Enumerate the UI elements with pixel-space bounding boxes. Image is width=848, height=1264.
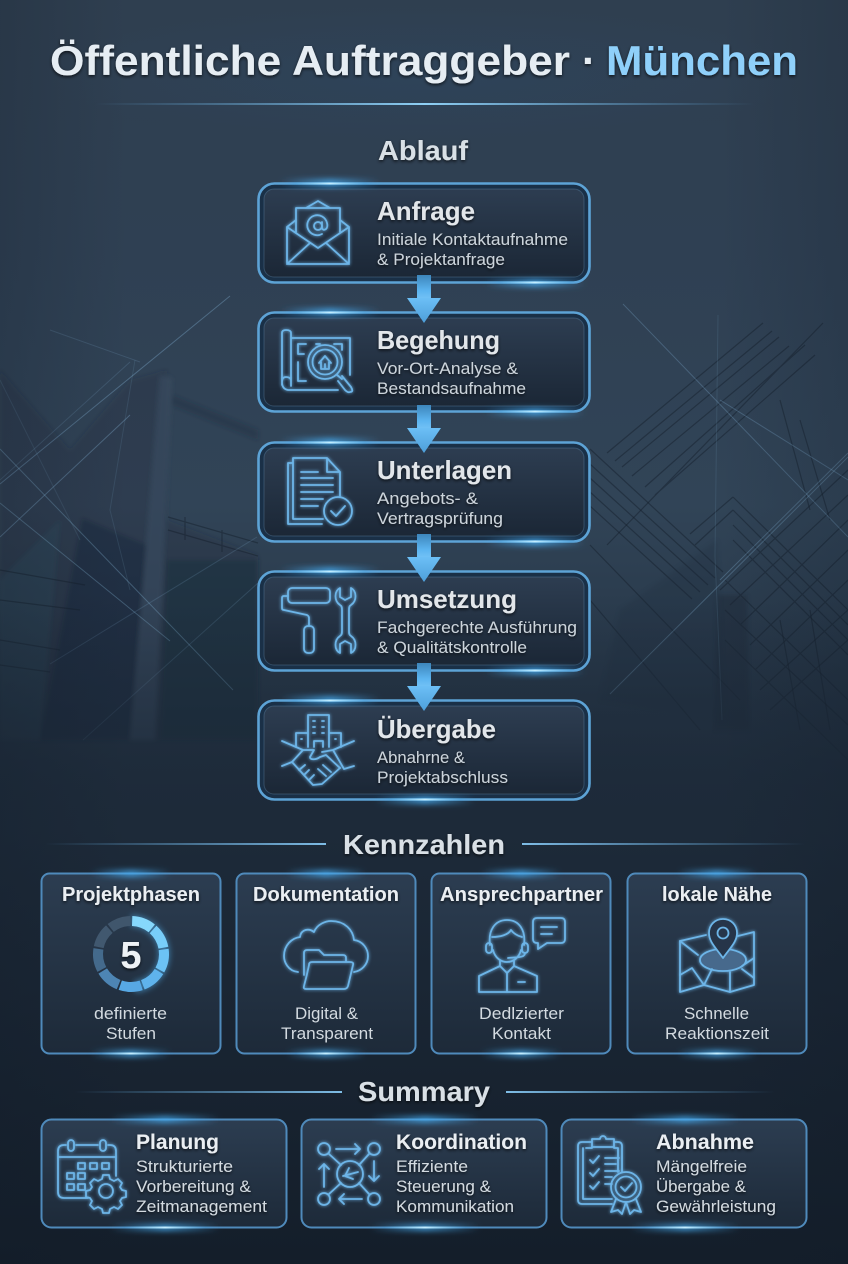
step 1: Anfrage: [258, 179, 590, 287]
step text: Begehung: [377, 325, 500, 355]
title: Öffentliche Auftraggeber: [50, 37, 570, 84]
arrow 3: [407, 534, 441, 582]
panel: Koordination: [302, 1116, 546, 1231]
icon: building and handshake: [282, 715, 354, 785]
step text: [377, 455, 512, 528]
step text: Vor-Ort-Analyse &: [377, 359, 519, 378]
process flow: [258, 179, 590, 804]
title: ·: [582, 37, 596, 84]
summary text: [656, 1131, 776, 1216]
icon: envelope: [287, 201, 349, 264]
icon: blueprint with magnifier: [282, 330, 352, 392]
step 3: Unterlagen: [258, 438, 590, 546]
summary text: Planung: [136, 1131, 219, 1154]
title divider: [95, 103, 755, 105]
panel: lokale Nähe: Reaktionszeit: [665, 1024, 769, 1043]
panel: Dokumentation: Dokumentation: [253, 884, 399, 906]
step text: Fachgerechte Ausführung: [377, 618, 577, 637]
summary text: Effiziente: [396, 1157, 468, 1176]
summary text: Kommunikation: [396, 1197, 514, 1216]
step text: & Qualitätskontrolle: [377, 638, 527, 657]
step text: Unterlagen: [377, 455, 512, 485]
summary text: [396, 1131, 527, 1216]
summary text: Koordination: [396, 1131, 527, 1154]
step text: & Projektanfrage: [377, 250, 505, 269]
arrow 4: [407, 663, 441, 711]
step 2: Begehung: [258, 308, 590, 416]
heading: Summary: Summary: [358, 1076, 490, 1107]
panel: lokale Nähe: Schnelle: [684, 1004, 749, 1023]
summary text: [136, 1131, 267, 1216]
panel: Projektphasen: Stufen: [106, 1024, 156, 1043]
summary text: Vorbereitung &: [136, 1177, 252, 1196]
panel: Projektphasen: definierte: [94, 1004, 167, 1023]
step text: Übergabe: [377, 714, 496, 744]
panel: lokale Nähe: lokale Nähe: [662, 884, 772, 906]
summary text: Mängelfreie: [656, 1157, 747, 1176]
panel: Planung: [42, 1116, 286, 1231]
panel: Dokumentation: [236, 870, 416, 1057]
icon: map with pin: [680, 919, 754, 992]
ring chart: 5: 5: [120, 935, 142, 977]
summary text: Strukturierte: [136, 1157, 233, 1176]
step text: Initiale Kontaktaufnahme: [377, 230, 568, 249]
step text: Abnahrne &: [377, 748, 466, 767]
summary text: Abnahme: [656, 1131, 754, 1154]
heading: Kennzahlen: Kennzahlen: [343, 829, 505, 860]
title: München: [606, 37, 798, 84]
arrow 2: [407, 405, 441, 453]
title: [50, 37, 798, 84]
icon: document with check: [288, 458, 352, 525]
icon: calendar with gear: [58, 1140, 126, 1213]
icon: cloud with folder: [284, 921, 368, 989]
step 4: Umsetzung: [258, 567, 590, 675]
panel: Dokumentation: Digital &: [295, 1004, 359, 1023]
panel: Projektphasen: [42, 870, 220, 1057]
step text: [377, 584, 577, 657]
step text: [377, 714, 508, 787]
step text: Projektabschluss: [377, 768, 508, 787]
icon: paint roller and wrench: [282, 588, 356, 653]
panel: Ansprechpartner: Kontakt: [492, 1024, 551, 1043]
summary text: Gewährleistung: [656, 1197, 776, 1216]
step text: Vertragsprüfung: [377, 509, 503, 528]
summary text: Steuerung &: [396, 1177, 492, 1196]
panel: Abnahme: [562, 1116, 806, 1231]
panel: Projektphasen: Projektphasen: [62, 884, 200, 906]
icon: agent with headset and speech bubble: [479, 918, 565, 992]
panel: Ansprechpartner: Dedlzierter: [479, 1004, 564, 1023]
step 5: Übergabe: [258, 696, 590, 804]
step text: Anfrage: [377, 196, 475, 226]
icon: coordination network: [318, 1143, 380, 1205]
step text: [377, 325, 526, 398]
arrow 1: [407, 275, 441, 323]
step text: [377, 196, 568, 269]
panel: Dokumentation: Transparent: [281, 1024, 373, 1043]
heading: Ablauf: Ablauf: [378, 135, 469, 166]
panel: Ansprechpartner: [432, 870, 610, 1057]
step text: Angebots- &: [377, 489, 479, 508]
panel: lokale Nähe: [628, 870, 806, 1057]
panel: Ansprechpartner: Ansprechpartner: [440, 884, 603, 906]
summary text: Zeitmanagement: [136, 1197, 267, 1216]
icon: clipboard with seal: [578, 1136, 641, 1214]
summary text: Übergabe &: [656, 1177, 747, 1196]
step text: Bestandsaufnahme: [377, 379, 526, 398]
step text: Umsetzung: [377, 584, 517, 614]
ring chart: 5: [84, 907, 178, 1001]
